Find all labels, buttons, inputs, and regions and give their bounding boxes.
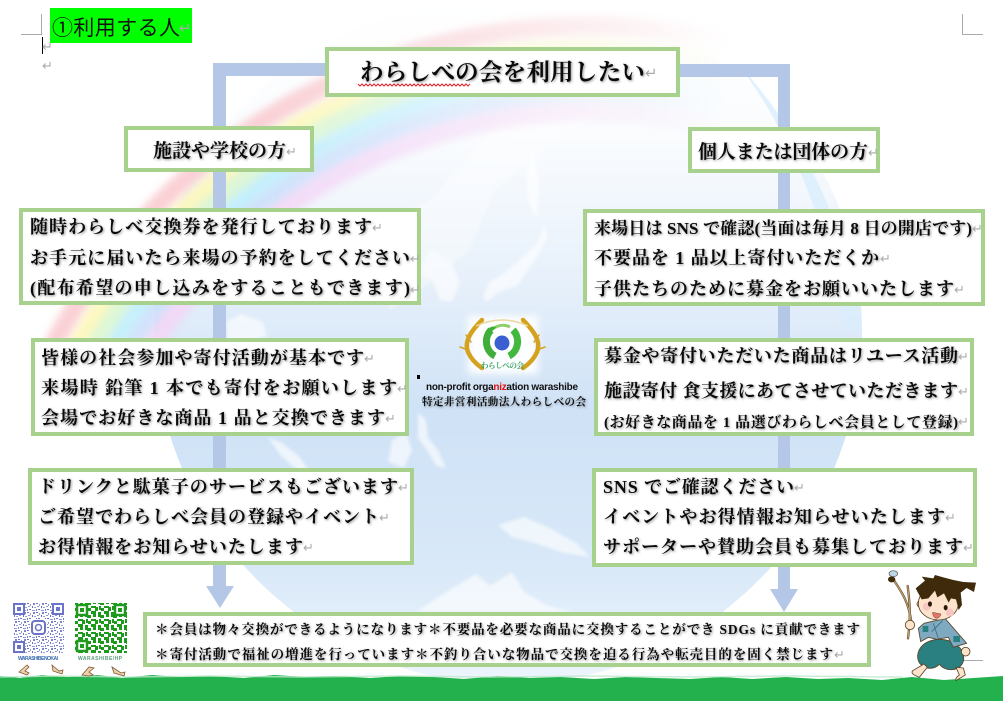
heading highlight: 利用する人: ①利用する人 [52,17,180,40]
panel: left 2: 会場でお好きな商品 1 品と交換できます [41,407,385,428]
panel: right 3: ↵ [963,541,974,556]
right header: 個人または団体の方 [690,129,879,171]
panel: left 3: ご希望でわらしべ会員の登録やイベント [38,506,379,527]
panel: right 1 [585,211,983,304]
panel: left 2: 皆様の社会参加や寄付活動が基本です [41,347,364,368]
panel: right 1: 子供たちのために募金をお願いいたします [594,278,954,299]
panel: right 3: SNS でご確認ください [603,477,794,497]
text cursor and paragraph marks: ↵ [42,59,53,74]
green ring [486,330,495,356]
panel: right 1: ↵ [880,252,891,267]
panel: right 1: ↵ [972,222,983,237]
panel: right 2: ↵ [958,385,969,400]
panel: left 1: ↵ [410,283,421,298]
dragonfly [888,576,895,582]
panel: left 2 [33,340,408,434]
panel: right 2: (お好きな商品を 1 品選びわらしべ会員として登録) [604,413,958,431]
panel: right 3: ↵ [794,481,805,496]
flow arrow: right [676,64,798,612]
logo: わらしべの会 [481,360,524,371]
map land shapes [227,60,640,612]
panel: right 3: ↵ [945,511,956,526]
panel: right 1: 不要品を 1 品以上寄付いただくか [594,247,879,268]
rainbow [53,26,730,345]
panel: left 1: (配布希望の申し込みをすることもできます) [30,277,410,299]
panel: left 3: ドリンクと駄菓子のサービスもございます [38,477,398,497]
panel: left 3: ↵ [379,511,390,526]
QR code: Instagram [13,603,64,662]
QR code: website: WARASHIBE/HP [78,656,123,662]
QR figures' feet [19,665,125,676]
panel: left 1: ↵ [410,252,421,267]
flow arrow: left [206,63,330,608]
panel: right 2 [596,340,972,434]
main title box: わらしべの会を利用したい [360,53,645,87]
hands [905,620,915,630]
panel: left 1: 随時わらしべ交換券を発行しております [30,217,372,237]
panel: right 1: ↵ [954,283,965,298]
character: boy with dragonfly [888,571,976,681]
panel: right 3 [594,470,975,565]
stick [893,579,911,638]
panel: left 3 [30,470,412,563]
kimono [918,618,967,647]
heading highlight: 利用する人 [50,8,192,43]
wheat wreath [460,320,545,368]
panel: right 2: 施設寄付 食支援にあてさせていただきます [604,380,958,401]
panel: right 3: イベントやお得情報お知らせいたします [603,506,945,527]
logo [460,316,545,374]
panel: right 3: サポーターや賛助会員も募集しております [603,536,963,557]
left header: 施設や学校の方: ↵ [286,145,297,160]
face [917,601,923,607]
panel: left 1: ↵ [372,221,383,236]
organisation name: 特定非営利活動法人わらしべの会 [422,394,586,409]
main title box: ↵ [645,64,658,82]
main title box [327,49,678,95]
panel: left 3: ↵ [398,481,409,496]
hair [916,575,976,610]
left header: 施設や学校の方: 施設や学校の方 [153,136,286,163]
left header: 施設や学校の方 [126,128,312,170]
text cursor and paragraph marks: ↵ [42,40,53,55]
panel: right 1: 来場日は SNS で確認(当面は毎月 8 日の開店です) [594,218,972,238]
bottom notice panel: ＊寄付活動で福祉の増進を行っています＊不釣り合いな物品で交換を迫る行為や転売目的を固く禁じます [155,646,833,663]
panel: left 3: ↵ [303,541,314,556]
pants [918,639,964,670]
text cursor and paragraph marks [42,37,53,74]
right header: 個人または団体の方: ↵ [868,146,879,161]
panel: right 2: ↵ [958,350,969,365]
panel: left 2: ↵ [385,412,396,427]
bottom notice panel: ＊会員は物々交換ができるようになります＊不要品を必要な商品に交換することができ SDGs に貢献できます [155,621,860,638]
grass strip [0,675,1003,701]
logo glow [468,316,538,374]
panel: right 2: ↵ [958,415,969,430]
QR code: Instagram: WARASHIBENOKAI [18,656,59,662]
right header: 個人または団体の方: 個人または団体の方 [698,137,868,164]
bottom notice panel: ↵ [834,648,845,663]
panel: left 1: お手元に届いたら来場の予約をしてください [30,248,410,268]
panel: left 3: お得情報をお知らせいたします [38,536,303,557]
panel: left 1 [21,210,421,303]
QR code: website [75,603,127,662]
heading highlight: 利用する人: ↵ [179,19,192,37]
background globe [154,0,862,684]
bottom notice panel [145,614,869,665]
organisation name: non-profit organization warashibe [426,382,578,393]
legs and sandals [912,664,927,677]
panel: right 2: 募金や寄付いただいた商品はリユース活動 [604,345,958,366]
organisation name [417,375,586,409]
panel: left 2: ↵ [364,352,375,367]
panel: left 2: ↵ [397,382,408,397]
panel: left 2: 来場時 鉛筆 1 本でも寄付をお願いします [41,377,397,398]
